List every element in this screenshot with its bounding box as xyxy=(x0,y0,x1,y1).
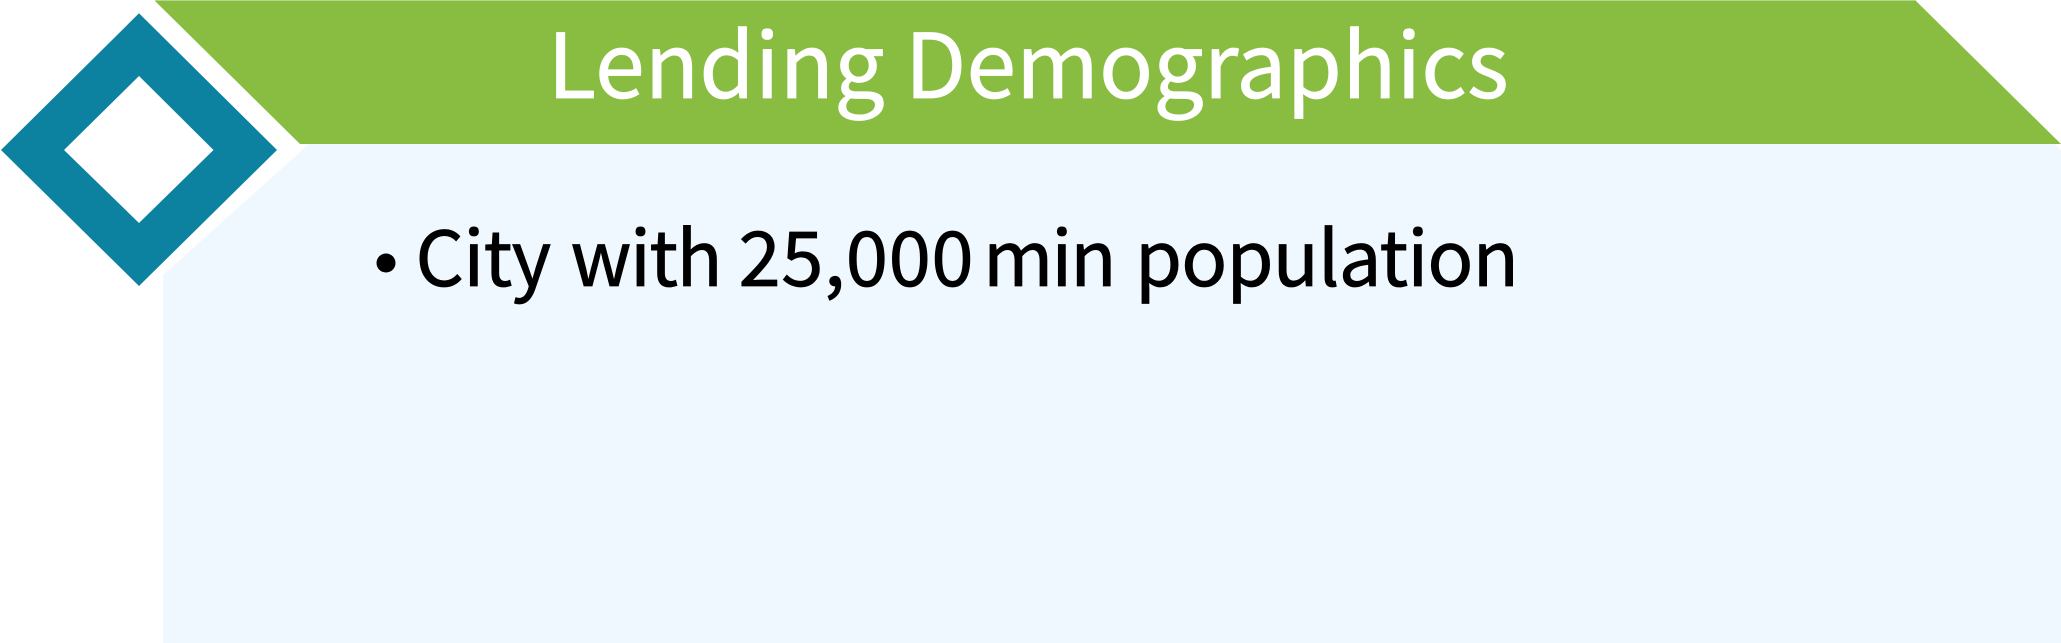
bullet label: City xyxy=(416,198,551,308)
bullet marker xyxy=(376,254,396,272)
bullet label: min xyxy=(983,198,1115,308)
bullet label: 25,000 xyxy=(738,198,974,308)
bullet label: with xyxy=(570,198,721,308)
icon: teal diamond outline xyxy=(1,13,277,286)
panel: title banner xyxy=(155,0,2061,144)
panel: content background xyxy=(163,144,2061,643)
bullet text xyxy=(376,198,1518,308)
bullet label: population xyxy=(1135,198,1518,308)
